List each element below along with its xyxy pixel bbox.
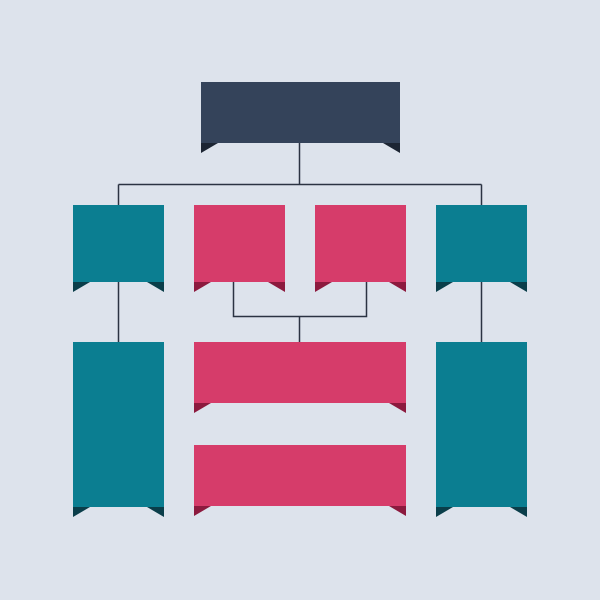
box: pink right row 2 (315, 205, 406, 292)
box: teal tall right (436, 342, 527, 517)
top box: navy (201, 82, 400, 153)
box: teal left row 2 (73, 205, 164, 292)
box: teal tall left (73, 342, 164, 517)
connector lines (118, 142, 482, 342)
box: pink left row 2 (194, 205, 285, 292)
box: teal right row 2 (436, 205, 527, 292)
box: pink wide upper (194, 342, 406, 413)
box: pink wide lower (194, 445, 406, 516)
